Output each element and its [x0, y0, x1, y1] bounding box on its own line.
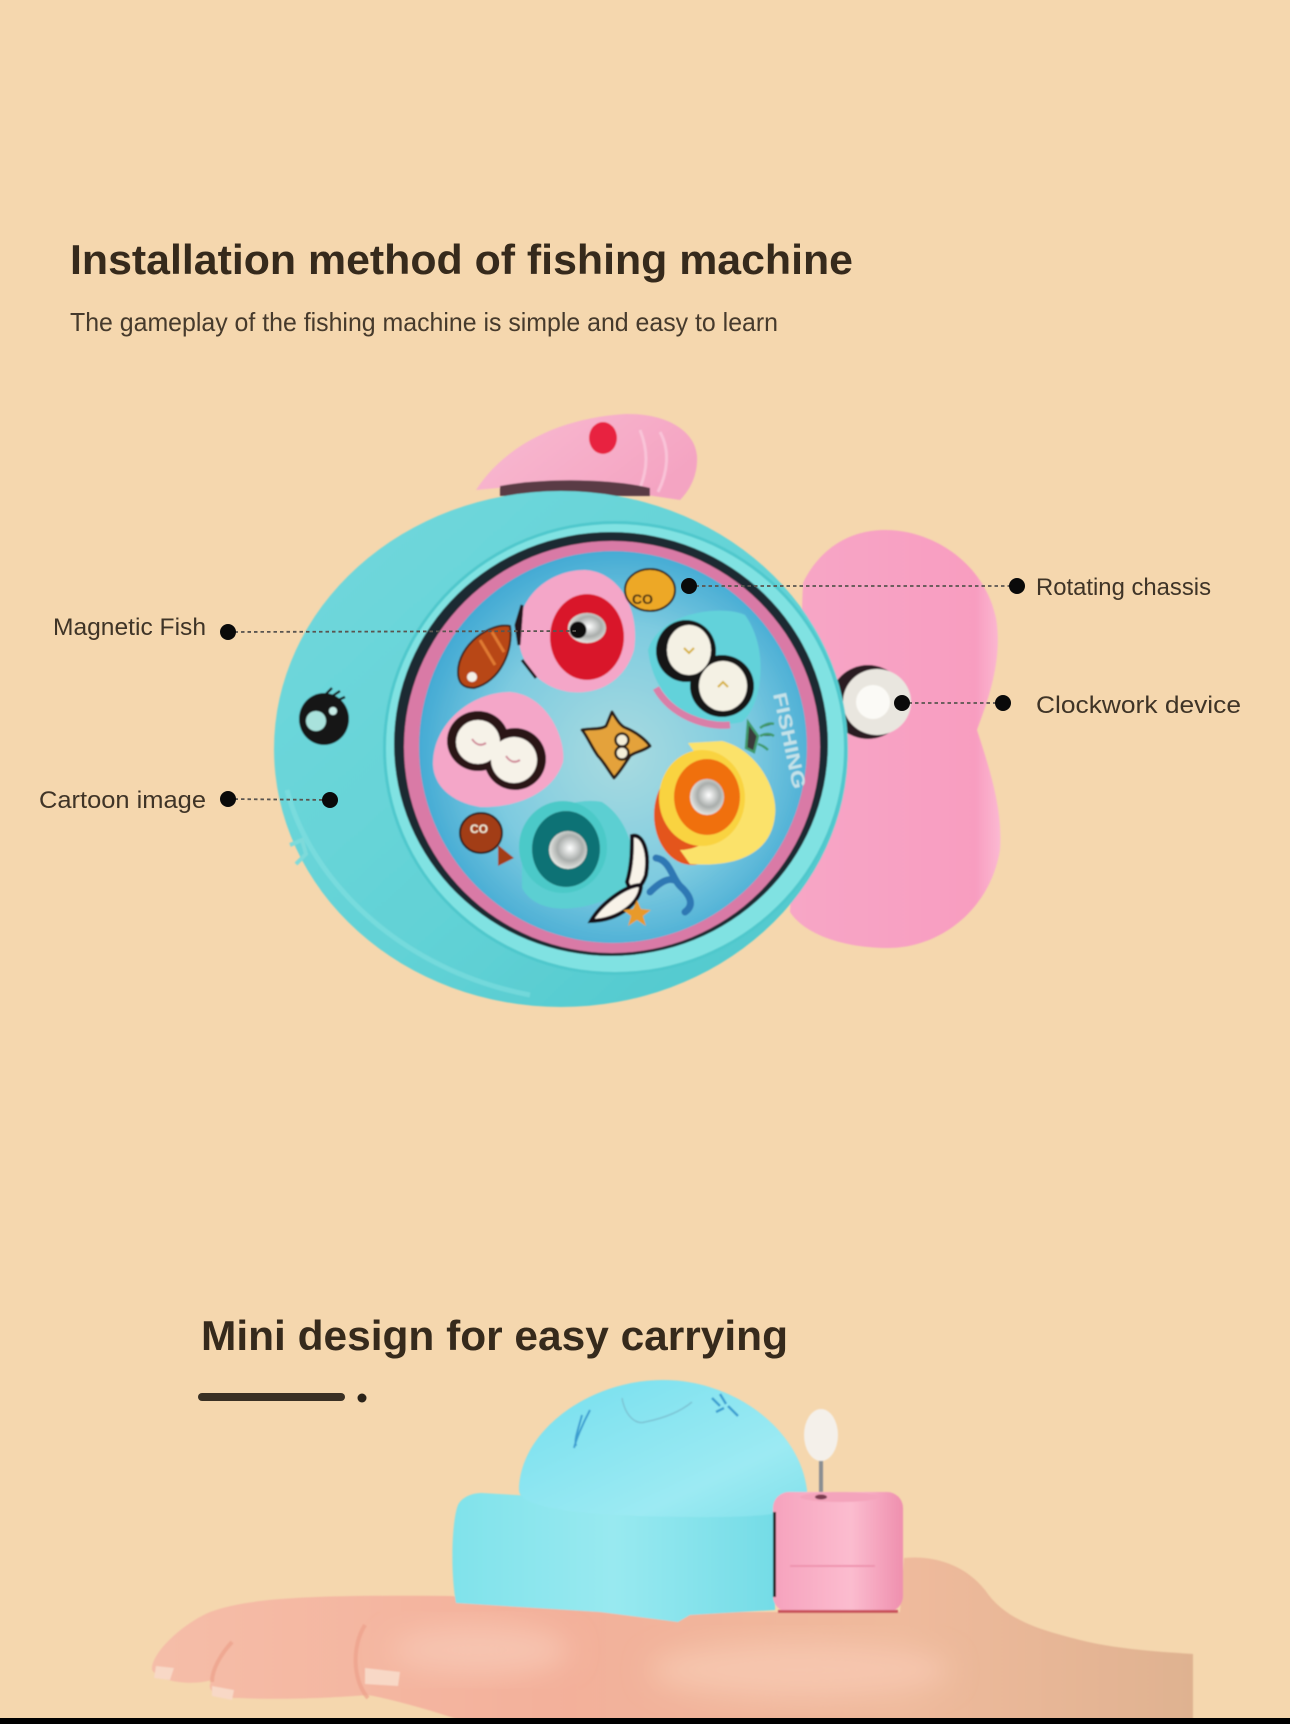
bottom black strip [0, 1718, 1290, 1724]
callout: Rotating chassis: Rotating chassis [1036, 574, 1211, 601]
pink piece with red cup [516, 570, 635, 692]
pink penguin piece [433, 692, 563, 807]
heading underline with dot [198, 1393, 366, 1402]
small star sticker [623, 900, 651, 926]
callout: Cartoon image: Cartoon image [39, 787, 206, 814]
callout: Cartoon image [39, 787, 338, 814]
yellow fish sticker: CO [632, 591, 653, 607]
seahorse sticker [650, 858, 690, 912]
red fish sticker [458, 626, 511, 688]
photo: toy on a hand [152, 1380, 1193, 1720]
callout: Magnetic Fish [53, 614, 578, 641]
rabbit ears [591, 836, 647, 921]
teal body [274, 491, 848, 1007]
clownfish sticker: CO [470, 822, 488, 836]
title: Installation method of fishing machine [70, 236, 853, 283]
dome [519, 1380, 807, 1517]
hand [152, 1557, 1193, 1720]
FISHING lettering: FISHING [768, 691, 809, 791]
callout: Rotating chassis [681, 574, 1211, 601]
winding knob [804, 1409, 838, 1503]
callout: Magnetic Fish: Magnetic Fish [53, 614, 206, 641]
play area [383, 521, 847, 975]
yellow fish sticker [625, 569, 675, 611]
cartoon eye [299, 688, 349, 745]
yellow piece with orange cup [654, 741, 775, 865]
subtitle: The gameplay of the fishing machine is simple and easy to learn [70, 307, 778, 337]
heading: mini design: Mini design for easy carrying [201, 1312, 788, 1359]
starfish sticker [582, 712, 650, 778]
pink gear box [773, 1492, 903, 1613]
clockwork knob [830, 665, 911, 739]
product: fish-shaped fishing toy, top view [274, 414, 1000, 1007]
pink tail [790, 530, 1000, 948]
teal piece with dark cup [519, 801, 633, 909]
blue penguin piece [648, 611, 761, 725]
base [452, 1493, 775, 1622]
plant sticker [746, 722, 774, 752]
clownfish sticker [460, 813, 514, 866]
callout: Clockwork device: Clockwork device [1036, 692, 1241, 719]
callout: Clockwork device [894, 692, 1241, 719]
top fin with red button [476, 414, 697, 500]
